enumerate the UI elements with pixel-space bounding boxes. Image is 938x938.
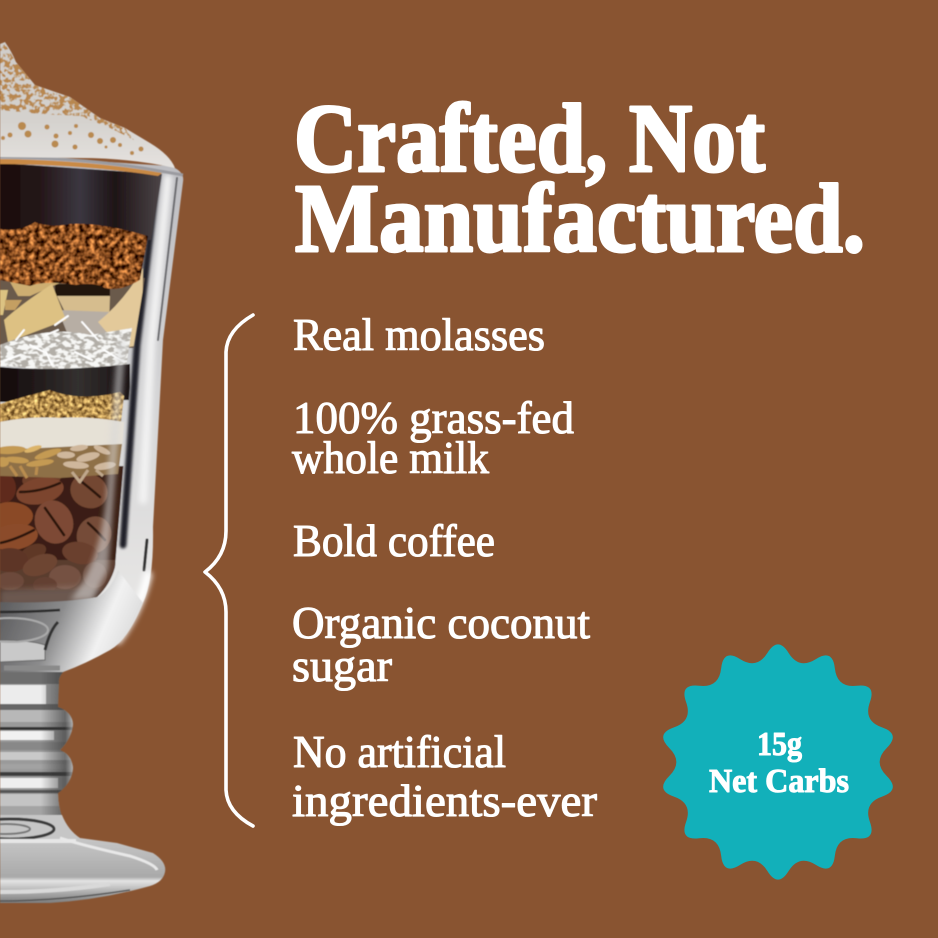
heading: Manufactured.: [295, 165, 865, 272]
badge text: 15g: [757, 726, 802, 763]
glass bowl wall: [0, 155, 183, 672]
item: molasses: Real molasses: [293, 309, 545, 360]
coconut chip layer: [0, 268, 160, 348]
item: coconut sugar: Organic coconut: [292, 597, 590, 648]
badge text: Net Carbs: [709, 763, 849, 800]
bottom of drink: [0, 590, 100, 602]
crumbs: [1, 122, 144, 155]
image: layered coffee glass: [0, 40, 183, 903]
badge text: [709, 726, 849, 800]
item: no artificial: ingredients-ever: [292, 775, 597, 826]
crumb band: [0, 44, 134, 140]
item: coconut sugar: [292, 597, 590, 691]
golden grain layer: [0, 389, 125, 422]
item: coffee: Bold coffee: [293, 515, 495, 566]
glass stem: [0, 672, 74, 816]
item: no artificial: [292, 726, 597, 826]
heading: [294, 85, 865, 272]
item: milk: [292, 392, 574, 483]
brace: [205, 315, 253, 826]
glass bottom reflections: [0, 610, 60, 668]
brown grain layer: [0, 221, 148, 290]
item: milk: whole milk: [292, 432, 489, 483]
badge shape: [663, 644, 893, 880]
glass wall reflections: [118, 178, 177, 640]
foam: [0, 42, 175, 168]
orange rim line: [0, 159, 162, 176]
white coconut flakes: [0, 316, 135, 374]
oat flake layer: [0, 443, 122, 483]
dark layer: [0, 364, 130, 402]
foam topping: [0, 40, 175, 168]
ingredient list: [292, 309, 597, 826]
glass rim: [0, 157, 183, 175]
item: milk: 100% grass-fed: [293, 392, 574, 443]
glass layers: [0, 160, 170, 606]
cream layer: [0, 418, 124, 452]
coffee beans layer: [0, 465, 125, 606]
glass haze: [70, 340, 126, 600]
glass foot reflections: [0, 819, 157, 901]
item: no artificial: No artificial: [293, 726, 506, 777]
coffee layer: [0, 160, 170, 240]
badge: 15g net carbs: [663, 644, 893, 880]
heading: Crafted, Not: [294, 85, 765, 192]
item: coconut sugar: sugar: [292, 640, 392, 691]
glass bowl bottom: [0, 570, 143, 672]
glass foot: [0, 815, 165, 903]
